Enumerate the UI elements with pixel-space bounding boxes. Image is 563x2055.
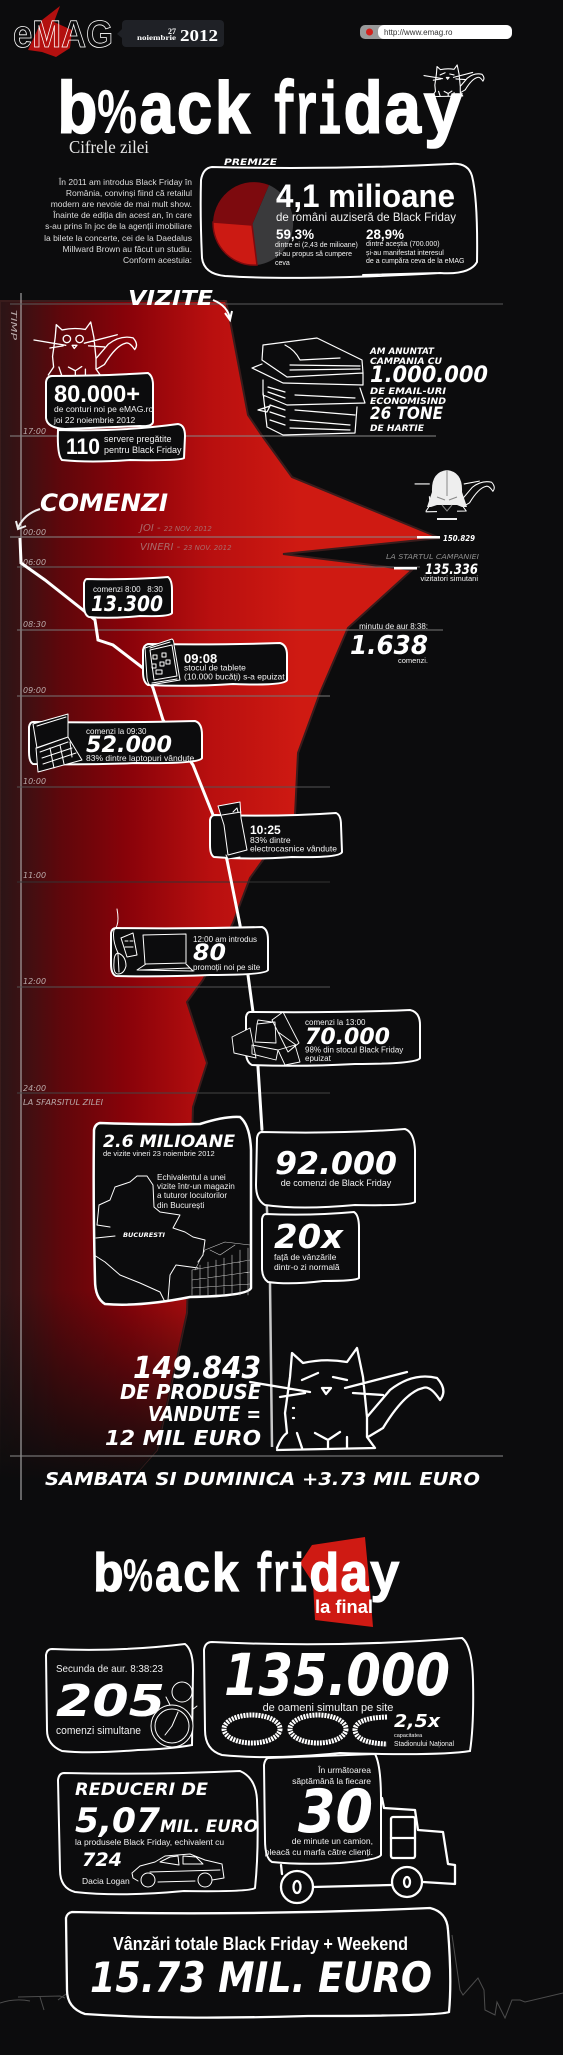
box: 2.6 milioane: de vizite vineri 23 noiembrie 2012	[103, 1149, 215, 1158]
box: tablets: (10.000 bucăți) s-a epuizat	[184, 672, 285, 682]
stat 59,3%: ceva	[275, 260, 290, 267]
title: black friday	[57, 72, 463, 155]
stat: 135.336: 135.336	[425, 562, 478, 578]
box: 80 promotii: 80	[193, 941, 226, 966]
stat: 135.336: vizitatori simutani	[420, 574, 478, 583]
axis labels: 10:00	[23, 777, 46, 786]
box: reduceri: MIL. EURO	[160, 1817, 258, 1837]
box: 70.000: epuizat	[305, 1054, 332, 1063]
stat: 149.843 products: 149.843	[133, 1351, 261, 1386]
box: 80 promotii: promoții noi pe site	[193, 963, 261, 972]
box: 70.000: comenzi la 13:00	[305, 1018, 366, 1027]
box: 13.300	[84, 577, 172, 618]
title: black friday la final: %	[123, 1549, 153, 1601]
url bar	[360, 25, 512, 39]
box: appliances: 10:25	[250, 823, 281, 837]
stat: 149.843 products: DE PRODUSE	[120, 1380, 261, 1404]
box: 135.000: 135.000	[224, 1641, 450, 1709]
icon: paper stack	[252, 338, 365, 435]
premize label: PREMIZE	[224, 158, 278, 168]
box: 20x: dintr-o zi normală	[274, 1262, 340, 1272]
text: email campaign: DE HARTIE	[370, 424, 424, 434]
icon: gadgets	[114, 909, 193, 974]
icons: stadiums	[224, 1715, 387, 1744]
box: 80.000+: 80.000+	[54, 381, 140, 408]
axis labels: 09:00	[23, 686, 46, 695]
map of Bucharest	[94, 1176, 205, 1302]
box: 135.000: de oameni simultan pe site	[263, 1702, 393, 1714]
box: 2.6 milioane: din București	[157, 1201, 205, 1210]
axis labels: 11:00	[23, 871, 46, 880]
box: 205	[46, 1644, 197, 1752]
subtitle: Cifrele zilei	[69, 137, 149, 157]
box: 20x	[262, 1212, 359, 1283]
title: black friday: day	[343, 72, 463, 155]
stat: 149.843 products	[105, 1351, 261, 1450]
skyline	[0, 1935, 563, 2018]
icon: cat on title	[424, 65, 484, 97]
stat 28,9%: de a cumpăra ceva de la eMAG	[366, 258, 464, 265]
title: black friday: fri	[273, 72, 341, 155]
box: 135.000: capacitatea	[394, 1733, 423, 1739]
box: 110 servere	[58, 424, 185, 462]
intro paragraph: Înainte de ediția din acest an, în care	[52, 210, 192, 220]
box: 110 servere: pentru Black Friday	[104, 445, 182, 455]
day labels: VINERI - 23 NOV. 2012	[140, 542, 232, 553]
date badge	[117, 20, 224, 47]
icon: darth vader cat	[415, 470, 494, 520]
box: 80 promotii: 12:00 am introdus	[193, 935, 257, 944]
box: 70.000: 70.000	[305, 1025, 390, 1050]
box: 80.000+: joi 22 noiembrie 2012	[53, 415, 136, 425]
icon: car	[132, 1854, 224, 1887]
box: 2.6 milioane: BUCURESTI	[123, 1231, 166, 1239]
orders line	[20, 538, 262, 1130]
text: email campaign: 1.000.000	[370, 363, 488, 388]
url bar: http://www.emag.ro	[384, 28, 453, 37]
stat: 1.638: 1.638	[350, 631, 428, 661]
axis labels: 08:30	[23, 620, 46, 629]
intro paragraph	[44, 177, 192, 265]
box: 135.000: Stadionului Național	[394, 1741, 454, 1748]
box: tablets: 09:08	[184, 651, 217, 666]
stat: 1.638: comenzi.	[398, 656, 428, 665]
stat: 135.336: LA STARTUL CAMPANIEI	[386, 553, 479, 561]
title: black friday: ack	[138, 72, 252, 155]
box: 205: comenzi simultane	[56, 1725, 141, 1737]
box: 70.000	[232, 1010, 420, 1066]
box: appliances: 83% dintre	[250, 835, 291, 845]
panel: premize: de români auziseră de Black Friday	[276, 210, 456, 224]
axis labels: LA SFARSITUL ZILEI	[23, 1098, 104, 1107]
box: laptops: 83% dintre laptopuri vândute	[86, 753, 194, 763]
box: 92.000: 92.000	[275, 1146, 397, 1182]
arrow: comenzi	[16, 509, 40, 529]
box: laptops	[29, 714, 202, 772]
axis labels	[9, 310, 104, 1107]
box: reduceri: la produsele Black Friday, echivalent cu	[75, 1837, 224, 1847]
box: truck: pleacă cu marfa către clienți.	[265, 1847, 373, 1857]
icon: building	[192, 1242, 250, 1295]
box: reduceri: REDUCERI DE	[75, 1780, 208, 1800]
icon: truck	[281, 1798, 455, 1903]
icon: boxes	[232, 1012, 300, 1065]
axis labels: TIMP	[9, 310, 18, 340]
icon: big cat	[250, 1348, 443, 1450]
stat: 150.829: 150.829	[443, 534, 475, 543]
axis labels: 17:00	[23, 427, 46, 436]
time axis	[10, 293, 503, 1500]
axis labels: 06:00	[23, 558, 46, 567]
box: laptops: 52.000	[86, 733, 172, 758]
box: 110 servere: 110	[66, 434, 100, 459]
brush: red behind final title	[300, 1537, 373, 1627]
axis labels: 24:00	[23, 1084, 46, 1093]
title: black friday: %	[97, 78, 137, 147]
icon: stopwatch	[151, 1682, 197, 1747]
stat: 1.638: minutu de aur 8:38:	[359, 622, 428, 631]
box: truck	[264, 1754, 455, 1903]
box: 205: 205	[56, 1676, 165, 1727]
pie chart	[213, 182, 293, 265]
box: 2.6 milioane: 2.6 MILIOANE	[103, 1132, 235, 1152]
intro paragraph: modern are nevoie de mai mult show.	[51, 199, 192, 209]
arrow: vizite	[213, 300, 232, 320]
box: 205: Secunda de aur. 8:38:23	[56, 1663, 163, 1675]
box: truck: săptămână la fiecare	[292, 1776, 371, 1786]
title: black friday: b	[57, 72, 98, 155]
intro paragraph: Millward Brown au făcut un studiu.	[63, 244, 192, 254]
stat 59,3%	[275, 226, 358, 267]
intro paragraph: s-au prins în joc de la agenții imobiliare	[45, 221, 192, 231]
stat: 149.843 products: 12 MIL EURO	[105, 1426, 261, 1450]
box: appliances	[210, 802, 342, 859]
box: total: Vânzări totale Black Friday + Weekend	[113, 1934, 408, 1954]
box: 2.6 milioane: Echivalentul a unei	[157, 1173, 226, 1182]
box: 80.000+	[46, 373, 153, 429]
heading: comenzi: COMENZI	[40, 489, 168, 517]
box: 135.000	[204, 1638, 473, 1757]
box: 80 promotii	[111, 909, 268, 976]
title: black friday la final: ack	[154, 1547, 240, 1608]
intro paragraph: În 2011 am introdus Black Friday în	[58, 177, 192, 187]
intro paragraph: România, convinși fiind că retailul	[66, 188, 192, 198]
stat 59,3%: și-au propus să cumpere	[275, 251, 352, 258]
panel: red visits area chart	[0, 301, 440, 1481]
intro paragraph: la bilete la concerte, cei de la Daedalus	[44, 233, 192, 243]
title: black friday la final: fri	[256, 1547, 307, 1608]
box: reduceri: 5,07	[75, 1801, 160, 1841]
title: black friday la final	[93, 1547, 400, 1608]
orders line lower	[262, 1130, 272, 1447]
box: 2.6 milioane: vizite într-un magazin	[157, 1182, 235, 1191]
box: 92.000: de comenzi de Black Friday	[281, 1178, 392, 1188]
title: black friday la final: b	[93, 1547, 124, 1608]
logo: eMAG: eMAG	[13, 14, 113, 56]
date badge: noiembrie	[137, 33, 177, 42]
box: truck: În următoarea	[317, 1765, 371, 1775]
icon: laptop	[33, 714, 82, 772]
text: email campaign: ECONOMISIND	[370, 397, 446, 407]
box: laptops: comenzi la 09:30	[86, 727, 147, 736]
box: reduceri: 724	[82, 1849, 122, 1871]
icon: tablet	[145, 639, 180, 685]
stat 28,9%: 28,9%	[366, 226, 405, 242]
box: truck: de minute un camion,	[292, 1836, 373, 1846]
box: 80.000+: de conturi noi pe eMAG.ro	[54, 404, 153, 414]
box: 2.6 milioane: a tuturor locuitorilor	[157, 1191, 227, 1200]
box: total	[66, 1908, 450, 2018]
box: tablets	[143, 639, 287, 686]
stat: 150.829	[417, 534, 475, 543]
text: email campaign: CAMPANIA CU	[370, 357, 442, 367]
box: 110 servere: servere pregătite	[104, 434, 172, 444]
subtitle: la final: la final	[315, 1597, 373, 1617]
box: 13.300: comenzi 8:00 8:30	[93, 585, 163, 594]
stat 28,9%: dintre aceștia (700.000)	[366, 241, 440, 248]
banner: weekend: SAMBATA SI DUMINICA +3.73 MIL EURO	[45, 1469, 480, 1490]
date badge: 27	[168, 27, 176, 36]
icon: happy cat	[34, 322, 136, 375]
icon: fridge	[218, 802, 247, 859]
text: email campaign: DE EMAIL-URI	[370, 387, 446, 397]
box: 92.000	[256, 1129, 415, 1208]
stat 28,9%	[366, 226, 464, 265]
text: email campaign: 26 TONE	[370, 404, 443, 424]
box: reduceri	[58, 1771, 258, 1894]
box: 70.000: 98% din stocul Black Friday	[305, 1046, 403, 1054]
text: email campaign	[369, 347, 488, 434]
stat 28,9%: și-au manifestat interesul	[366, 250, 444, 257]
stat: 1.638	[350, 622, 428, 665]
stat: 135.336	[386, 553, 479, 583]
main stat: 4,1 milioane	[276, 178, 455, 214]
text: email campaign: AM ANUNTAT	[369, 347, 435, 357]
stat 59,3%: dintre ei (2,43 de milioane)	[275, 242, 358, 249]
stat 59,3%: 59,3%	[276, 226, 315, 242]
box: 135.000: 2,5x	[394, 1711, 441, 1732]
box: tablets: stocul de tablete	[184, 662, 246, 672]
box: 20x: față de vânzările	[274, 1252, 337, 1262]
axis labels: 12:00	[23, 977, 46, 986]
box: total: 15.73 MIL. EURO	[90, 1953, 432, 2002]
box: 2.6 milioane	[94, 1117, 251, 1305]
box: 20x: 20x	[274, 1217, 345, 1256]
axis labels: 00:00	[23, 528, 46, 537]
day labels	[138, 523, 232, 553]
stat: 149.843 products: VANDUTE =	[148, 1402, 261, 1426]
box: reduceri: Dacia Logan	[82, 1876, 130, 1886]
box: truck: 30	[298, 1777, 373, 1847]
intro paragraph: Conform acestuia:	[123, 255, 192, 265]
day labels: JOI - 22 NOV. 2012	[138, 523, 212, 534]
box: 13.300: 13.300	[91, 592, 163, 616]
box: appliances: electrocasnice vândute	[250, 844, 337, 854]
title: black friday la final: day	[309, 1547, 400, 1608]
date badge: 2012	[180, 26, 218, 45]
panel: premize	[201, 158, 477, 278]
heading: vizite: VIZITE	[128, 286, 213, 310]
